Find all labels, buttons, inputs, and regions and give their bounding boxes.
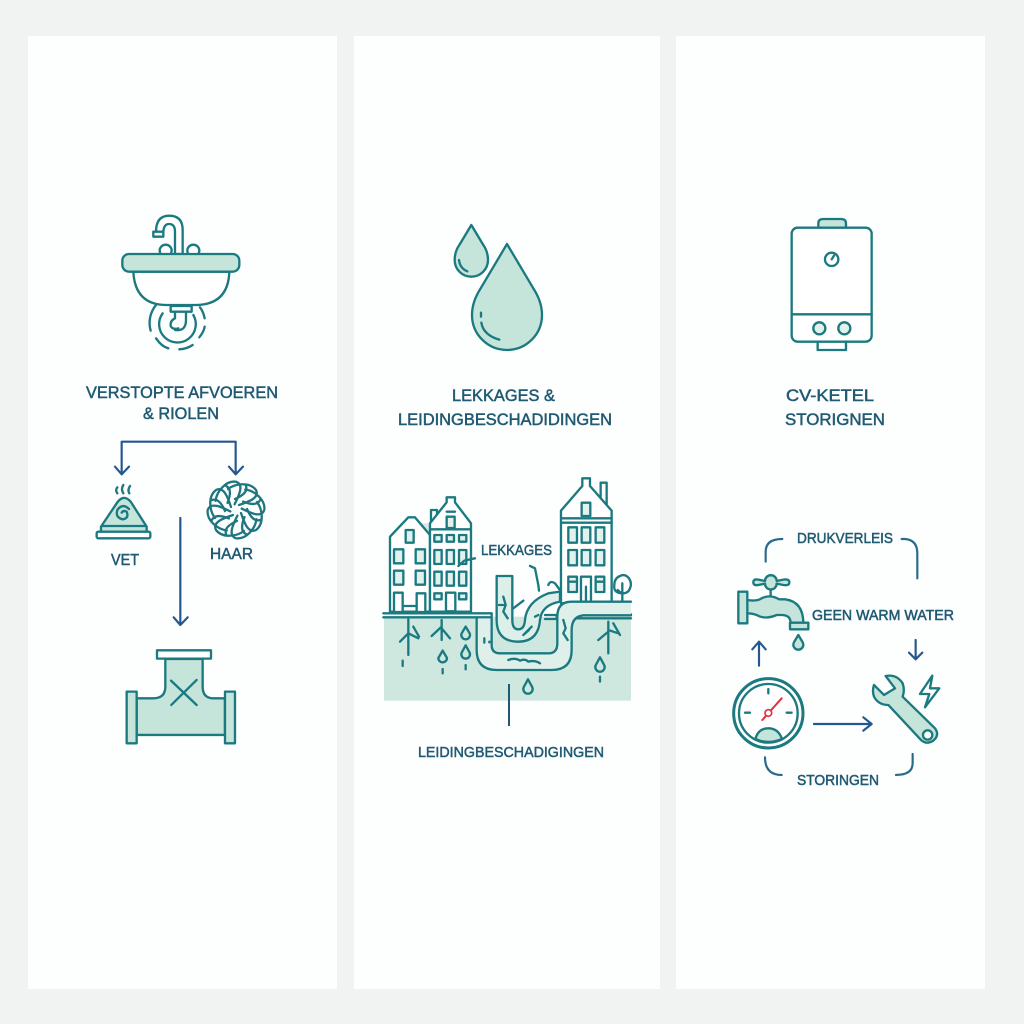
icon: faucet bbox=[738, 575, 808, 650]
label: lekkages: LEKKAGES bbox=[481, 542, 552, 559]
house left bbox=[390, 517, 430, 612]
heading: verstopte afvoeren en riolen: VERSTOPTE AFVOEREN bbox=[86, 383, 278, 402]
ground lines bbox=[383, 613, 631, 619]
icon: wrench and lightning bbox=[873, 676, 939, 743]
heading: cv-ketel storingen: CV-KETEL bbox=[786, 386, 874, 405]
house right bbox=[561, 478, 612, 603]
illustration: canal houses and underground pipes bbox=[383, 478, 631, 701]
arrow: split bracket to vet and haar bbox=[115, 442, 243, 474]
heading: lekkages en leidingbeschadigingen: LEKKAGES & bbox=[452, 386, 556, 405]
label: storingen: STORINGEN bbox=[797, 773, 879, 789]
label: leidingbeschadigingen: LEIDINGBESCHADIGINGEN bbox=[418, 744, 604, 761]
leader line bbox=[508, 684, 510, 726]
icon: haar bbox=[203, 477, 269, 543]
cycle diagram brackets bbox=[765, 539, 917, 775]
heading: lekkages en leidingbeschadigingen: LEIDINGBESCHADIDINGEN bbox=[398, 410, 612, 429]
icon: boiler bbox=[792, 219, 872, 350]
label: drukverleis: DRUKVERLEIS bbox=[797, 531, 893, 547]
heading: verstopte afvoeren en riolen: & RIOLEN bbox=[143, 404, 219, 423]
roots bbox=[400, 619, 620, 682]
heading: lekkages en leidingbeschadigingen bbox=[398, 386, 612, 429]
heading: verstopte afvoeren en riolen bbox=[86, 383, 278, 423]
panel: verstopte afvoeren en riolen bbox=[28, 36, 337, 989]
lower pipe bbox=[477, 602, 631, 670]
heading: cv-ketel storingen: STORIGNEN bbox=[785, 410, 885, 429]
icon: pressure gauge bbox=[734, 679, 803, 748]
panel: cv-ketel storingen bbox=[676, 36, 985, 989]
heading: cv-ketel storingen bbox=[785, 386, 885, 429]
arrow: gauge to faucet bbox=[752, 642, 766, 666]
icon: water drops bbox=[455, 225, 542, 350]
panel: lekkages en leidingbeschadigingen bbox=[354, 36, 660, 989]
arrow: gauge to wrench bbox=[814, 717, 872, 731]
icon: vet bbox=[97, 485, 150, 538]
label: vet: VET bbox=[111, 552, 139, 569]
label: geen warm water: GEEN WARM WATER bbox=[812, 608, 954, 624]
leak drops bbox=[438, 627, 605, 694]
label: haar: HAAR bbox=[210, 546, 253, 563]
U-shaped broken pipe bbox=[497, 566, 560, 642]
arrow: down to pipe bbox=[174, 518, 188, 625]
icon: clogged T-pipe bbox=[127, 650, 235, 743]
tree bbox=[614, 575, 631, 602]
icon: sink with clog bbox=[122, 216, 239, 349]
arrow: water to wrench bbox=[909, 640, 922, 659]
house middle bbox=[430, 497, 475, 612]
